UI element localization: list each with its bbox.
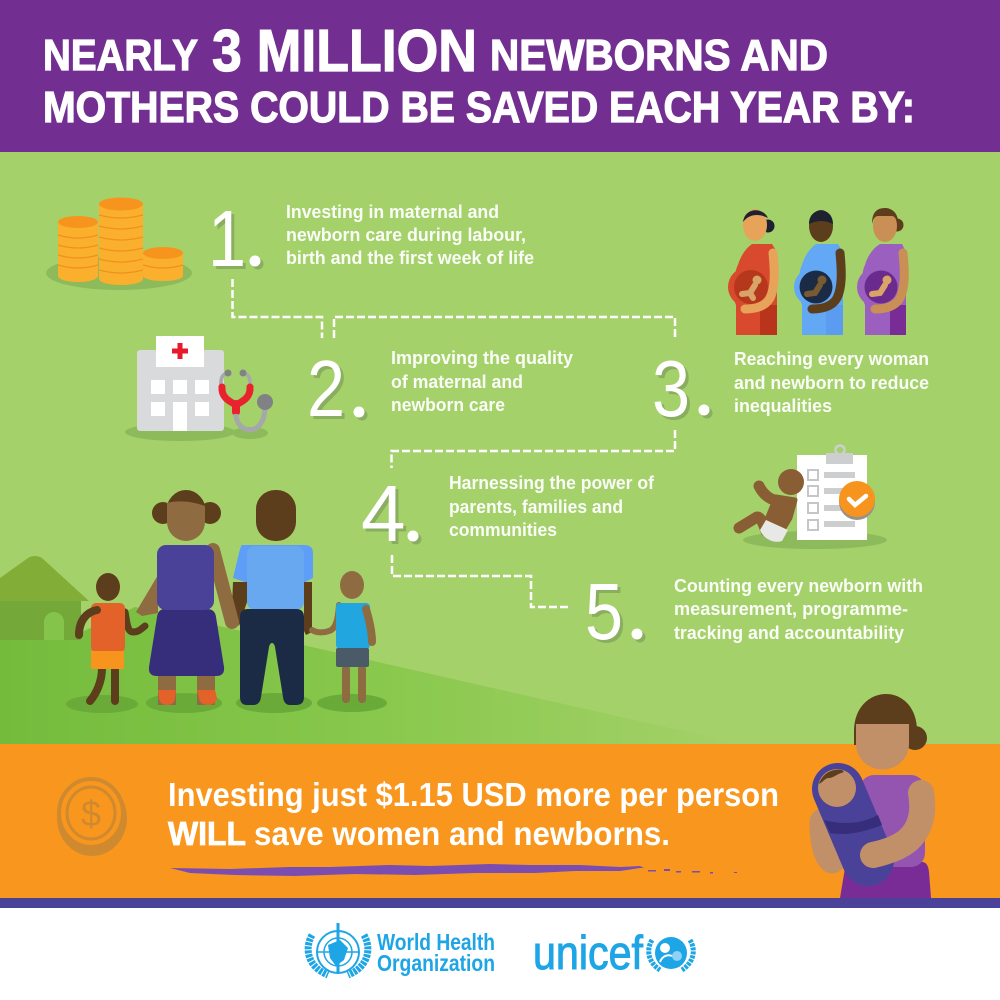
icon: dollar coin: $	[81, 793, 101, 834]
step 5 number: 5	[588, 570, 626, 659]
header title	[0, 0, 1000, 152]
mother	[136, 490, 232, 705]
logo: unicef: unicef	[533, 926, 644, 979]
step 5 text: measurement, programme-	[674, 599, 908, 619]
purple strip	[0, 898, 1000, 908]
banner message: save women and newborns.	[254, 815, 670, 852]
woman in blue	[794, 210, 843, 335]
header title: NEWBORNS AND	[490, 31, 828, 80]
icon: dollar coin	[57, 779, 127, 856]
icon: baby with checklist	[739, 446, 887, 549]
step 3 text	[734, 349, 929, 416]
logo: World Health Organization: World Health	[377, 929, 495, 955]
step 3 text: and newborn to reduce	[734, 373, 929, 393]
step 3 number: 3	[652, 344, 690, 433]
step 4 text: parents, families and	[449, 497, 623, 517]
child in orange	[79, 573, 145, 701]
logo: World Health Organization: Organization	[377, 950, 495, 976]
icon: hospital with stethoscope	[125, 336, 273, 441]
step 5 text: Counting every newborn with	[674, 576, 923, 596]
header title: NEARLY	[43, 31, 198, 80]
dashed connector 1 to 2	[232, 279, 322, 338]
step 1 text: birth and the first week of life	[286, 248, 534, 268]
step 2 text	[391, 348, 573, 415]
brush stroke underline	[170, 864, 737, 876]
father	[232, 490, 313, 705]
step 4 number: 4	[364, 472, 408, 561]
ground hill	[0, 607, 745, 745]
banner message: Investing just $1.15 USD more per person	[168, 776, 779, 813]
step 2 number: 2	[310, 347, 348, 436]
step 5 text	[674, 576, 923, 643]
step 1 number: 1	[211, 197, 249, 286]
step 3 text: Reaching every woman	[734, 349, 929, 369]
step 4 number: 4	[361, 469, 406, 558]
step 1 text	[286, 202, 534, 268]
WHO emblem	[308, 923, 368, 975]
header title: 3 MILLION	[212, 18, 477, 84]
step 3 number: 3	[655, 347, 693, 436]
step 3 text: inequalities	[734, 396, 832, 416]
logo: World Health Organization	[308, 923, 495, 976]
woman in red	[728, 209, 777, 335]
orange banner	[0, 744, 1000, 898]
header title: MOTHERS COULD BE SAVED EACH YEAR BY:	[43, 83, 915, 132]
step 2 text: Improving the quality	[391, 348, 573, 368]
woman in purple	[857, 208, 906, 335]
step 1 text: newborn care during labour,	[286, 225, 526, 245]
step 5 text: tracking and accountability	[674, 623, 904, 643]
step 2 text: newborn care	[391, 395, 505, 415]
step 1 text: Investing in maternal and	[286, 202, 499, 222]
banner message	[168, 776, 779, 852]
step 4 text: Harnessing the power of	[449, 473, 655, 493]
banner message: WILL	[168, 815, 246, 852]
dashed connector 3 to 4	[392, 430, 675, 468]
icon: coin stacks	[46, 198, 192, 290]
icon: three pregnant women	[728, 208, 906, 335]
step 4 text	[449, 473, 655, 540]
unicef emblem	[649, 937, 693, 970]
child in blue	[312, 571, 372, 703]
dashed connector 2 to 3	[334, 317, 675, 338]
illustration: mother holding baby	[818, 694, 931, 898]
step 2 number: 2	[307, 344, 345, 433]
icon: village hut	[0, 556, 89, 640]
step 2 text: of maternal and	[391, 372, 523, 392]
illustration: family	[66, 490, 387, 713]
step 1 number: 1	[208, 194, 246, 283]
step 4 text: communities	[449, 520, 557, 540]
dashed connector 4 to 5	[392, 555, 568, 607]
step 5 number: 5	[585, 567, 623, 656]
